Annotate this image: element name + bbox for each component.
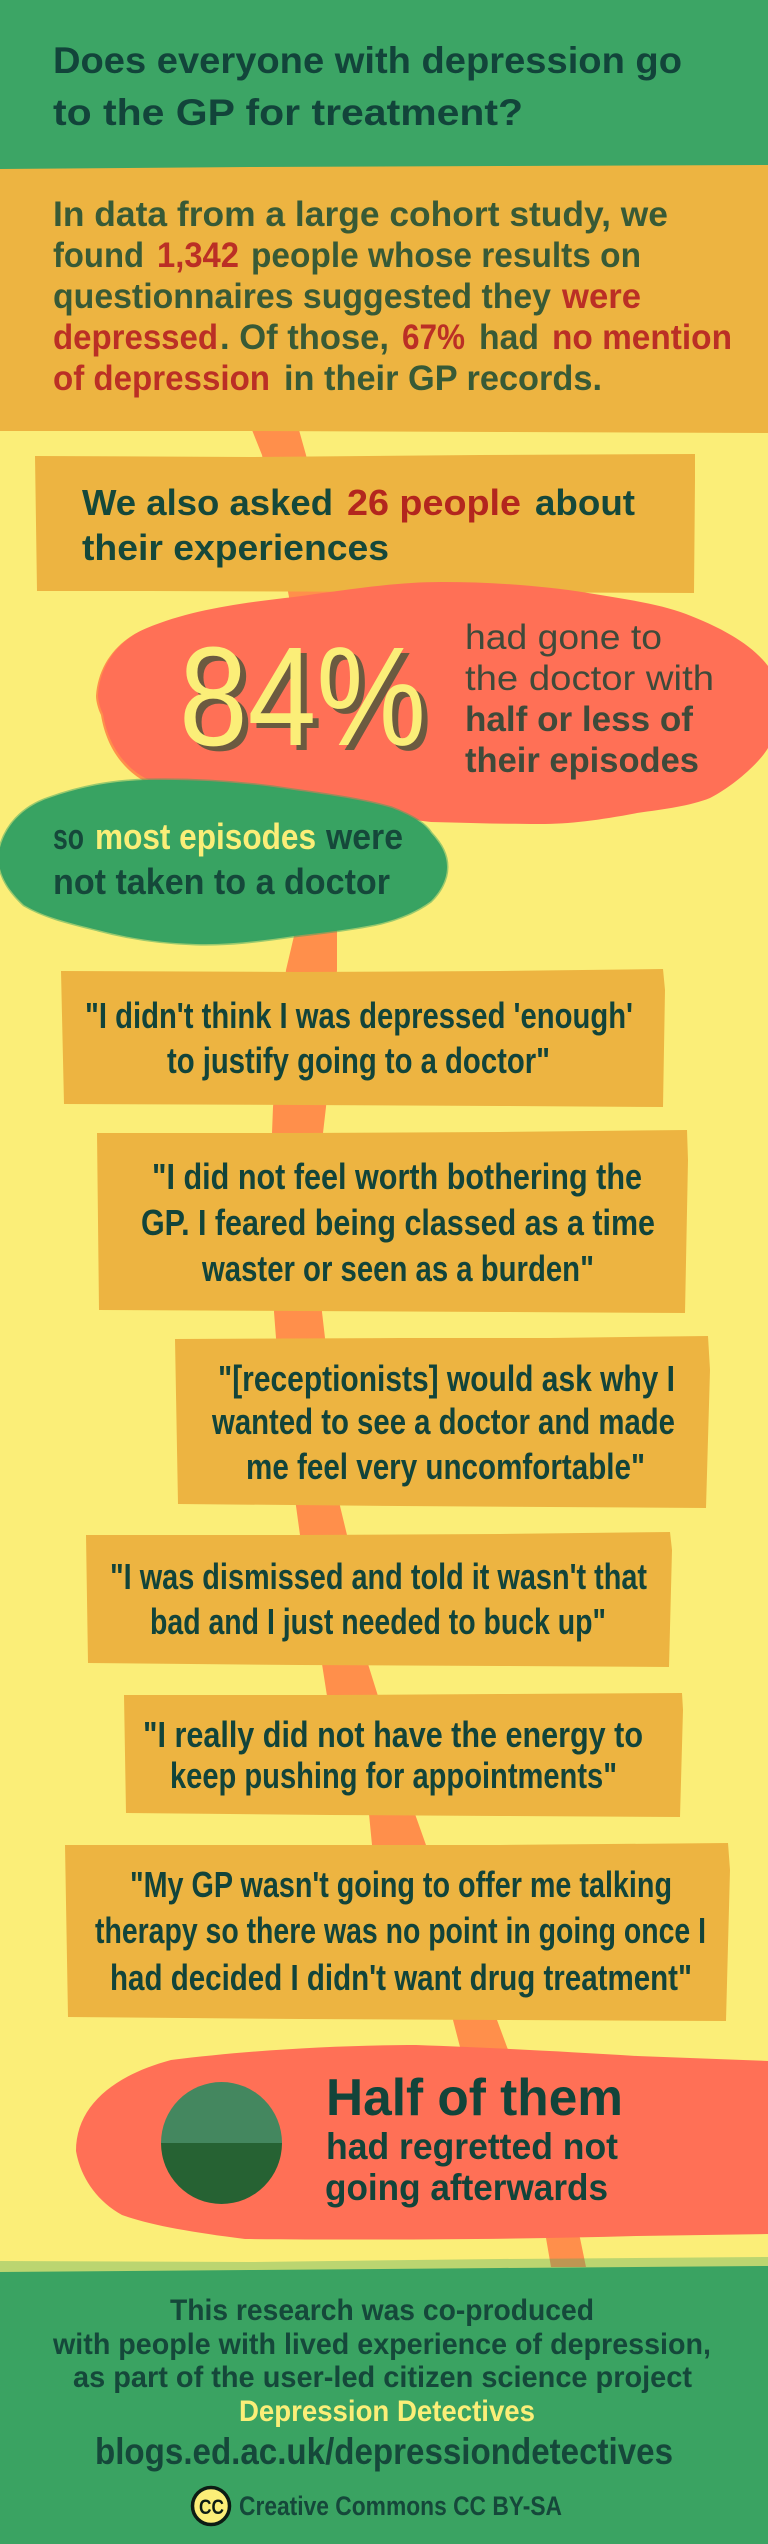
co-production credit: This research was co-produced [170, 2294, 594, 2327]
episodes text: not taken to a doctor [53, 861, 390, 902]
quote 1: "I didn't think I was depressed 'enough' [85, 995, 633, 1036]
quote 4 [86, 1532, 672, 1667]
finding text: . Of those, [220, 318, 389, 357]
84% figure: 84% [179, 617, 426, 775]
quote 2: "I did not feel worth bothering the [152, 1156, 642, 1197]
regret description: going afterwards [325, 2167, 608, 2208]
co-production credit: Depression Detectives [239, 2395, 535, 2428]
quote 3 [175, 1336, 710, 1508]
finding text: questionnaires suggested they [53, 277, 552, 316]
quote 3: wanted to see a doctor and made [211, 1401, 675, 1442]
panel: cohort study finding [0, 165, 768, 433]
icon: creative commons [192, 2488, 230, 2524]
episodes text: most episodes [95, 816, 316, 857]
quote 5: keep pushing for appointments" [170, 1755, 617, 1796]
co-production credit: with people with lived experience of depression, [52, 2328, 711, 2361]
finding text: depressed [53, 318, 218, 357]
title [53, 40, 682, 133]
finding text: people whose results on [251, 236, 641, 275]
quote 4: bad and I just needed to buck up" [150, 1601, 606, 1642]
quote 1 [61, 969, 665, 1107]
quote 2: waster or seen as a burden" [201, 1248, 594, 1289]
quote 1: to justify going to a doctor" [167, 1040, 550, 1081]
half-filled circle icon [161, 2082, 282, 2204]
finding text: 67% [402, 318, 465, 357]
episodes text [53, 816, 403, 902]
finding text: were [561, 277, 641, 316]
84% description: half or less of [465, 700, 693, 739]
episodes text: were [325, 816, 403, 857]
signpost stem [252, 430, 586, 2267]
header band [0, 0, 768, 172]
footer band [0, 2257, 768, 2544]
finding text [53, 195, 732, 398]
licence label: Creative Commons CC BY-SA [239, 2491, 562, 2521]
episodes text: so [53, 816, 84, 857]
interview text [82, 482, 635, 568]
quote 4: "I was dismissed and told it wasn't that [110, 1556, 647, 1597]
regret description [325, 2126, 618, 2208]
project url: blogs.ed.ac.uk/depressiondetectives [95, 2431, 673, 2472]
quote 3: me feel very uncomfortable" [246, 1446, 645, 1487]
quote 2: GP. I feared being classed as a time [141, 1202, 655, 1243]
co-production credit: as part of the user-led citizen science project [73, 2361, 692, 2394]
co-production credit [52, 2294, 711, 2428]
finding text: in their GP records. [284, 359, 602, 398]
84% description [465, 618, 714, 780]
finding text: had [479, 318, 539, 357]
finding text: found [53, 236, 144, 275]
finding text: 1,342 [157, 236, 239, 275]
interview text: 26 people [347, 482, 521, 523]
quote 3: "[receptionists] would ask why I [218, 1358, 675, 1399]
interview text: about [535, 482, 635, 523]
blob: 84 percent statistic [96, 582, 768, 824]
84% description: had gone to [465, 618, 662, 657]
84% figure: 84% [185, 622, 432, 780]
finding text: In data from a large cohort study, we [53, 195, 668, 234]
quote 2 [97, 1130, 688, 1313]
interview text: their experiences [82, 527, 389, 568]
blob: half of them regretted [76, 2045, 768, 2240]
title: Does everyone with depression go [53, 40, 682, 81]
finding text: no mention [552, 318, 732, 357]
title: to the GP for treatment? [53, 92, 523, 133]
interview text: We also asked [82, 482, 333, 523]
quote 5: "I really did not have the energy to [143, 1714, 643, 1755]
regret heading: Half of them [326, 2069, 623, 2127]
quote 6 [65, 1843, 730, 2021]
84% description: their episodes [465, 741, 699, 780]
84% description: the doctor with [465, 659, 714, 698]
blob: most episodes [0, 780, 447, 944]
icon: creative commons: CC [199, 2496, 224, 2519]
finding text: of depression [53, 359, 270, 398]
panel: 26 people [35, 454, 695, 593]
quote 5 [124, 1693, 683, 1817]
regret description: had regretted not [326, 2126, 618, 2167]
